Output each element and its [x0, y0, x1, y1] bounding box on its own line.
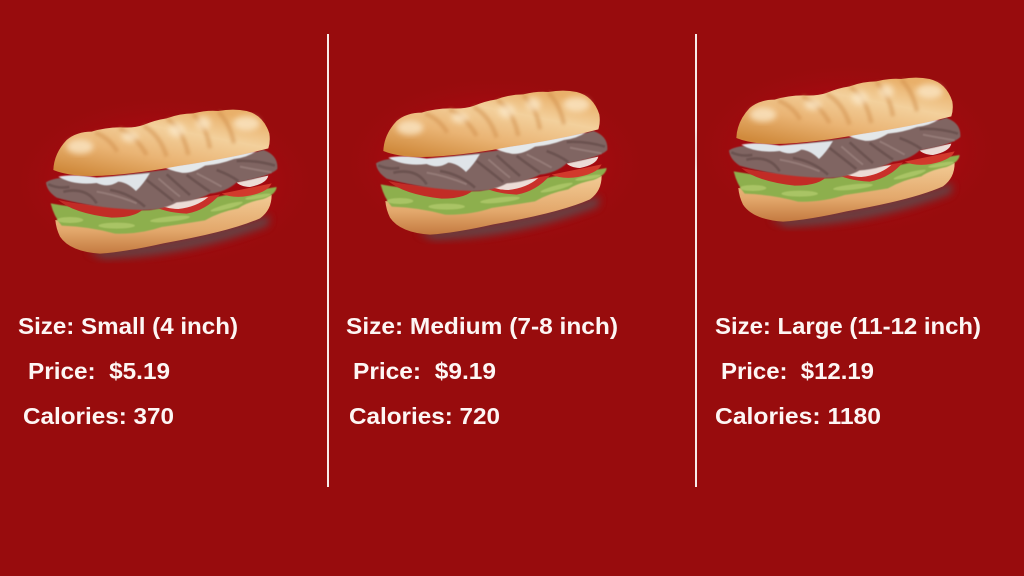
- text: large price: Price: $12.19: [721, 358, 874, 384]
- text: small calories: Calories: 370: [23, 403, 174, 429]
- text: small size: Size: Small (4 inch): [18, 313, 238, 339]
- panel: small sandwich: [8, 92, 322, 429]
- divider: right: [695, 34, 697, 487]
- text: medium calories: Calories: 720: [349, 403, 500, 429]
- divider: left: [327, 34, 329, 487]
- icon: medium sandwich: [338, 73, 652, 253]
- text: large size: Size: Large (11-12 inch): [715, 313, 981, 339]
- icon: large sandwich: [691, 60, 1005, 240]
- text: medium price: Price: $9.19: [353, 358, 496, 384]
- text: large calories: Calories: 1180: [715, 403, 881, 429]
- icon: small sandwich: [8, 92, 322, 272]
- panel: large sandwich: [691, 60, 1005, 429]
- panel: medium sandwich: [338, 73, 652, 429]
- text: small price: Price: $5.19: [28, 358, 170, 384]
- text: medium size: Size: Medium (7-8 inch): [346, 313, 618, 339]
